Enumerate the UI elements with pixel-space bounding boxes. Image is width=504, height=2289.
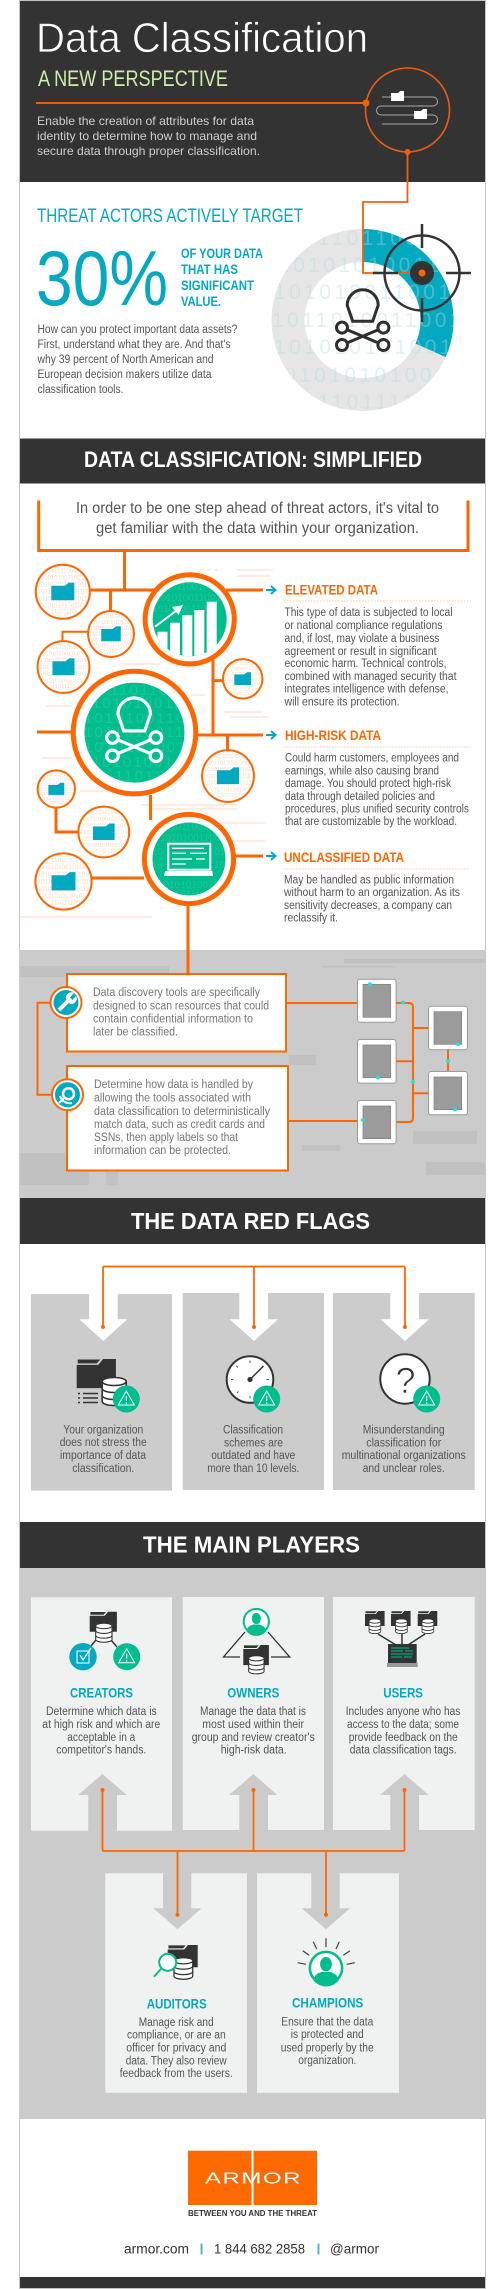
faint background lines bbox=[20, 570, 273, 917]
contact line: 1 844 682 2858 bbox=[214, 2240, 305, 2256]
section header: red flags bbox=[20, 1198, 485, 1244]
section header: simplified: DATA CLASSIFICATION: SIMPLIFIED bbox=[84, 447, 422, 472]
panel: creators: Determine which data is bbox=[46, 1706, 157, 1718]
text block: unclassified data: sensitivity decreases, a company can bbox=[284, 900, 452, 912]
panel: red flag one: importance of data bbox=[60, 1450, 147, 1462]
text block: unclassified data: UNCLASSIFIED DATA bbox=[284, 849, 404, 865]
intro text bbox=[76, 500, 439, 537]
binary pattern: 101010100110010 bbox=[278, 254, 503, 277]
heading: threat actors: THREAT ACTORS ACTIVELY TARGET bbox=[37, 206, 303, 227]
icon: laptop circle: 01 bbox=[214, 847, 226, 858]
text block: elevated data: combined with managed security that bbox=[284, 671, 457, 683]
text block: high-risk data: damage. You should protect high-risk bbox=[285, 778, 451, 790]
diagram connectors bbox=[37, 550, 263, 974]
icon: skull circle: 10101001100010 bbox=[92, 695, 236, 712]
icon: gauge bbox=[227, 1356, 280, 1412]
panel: creators: at high risk and which are bbox=[42, 1719, 160, 1731]
panel: red flag one: does not stress the bbox=[60, 1437, 147, 1449]
text block: elevated data: or national compliance regulations bbox=[284, 620, 443, 632]
panel: red flag two bbox=[183, 1293, 324, 1490]
arrow: high risk bbox=[266, 731, 276, 739]
binary pattern bbox=[274, 230, 454, 409]
text block: elevated data: ELEVATED DATA bbox=[285, 582, 378, 598]
panel: main players background bbox=[19, 1568, 486, 2119]
icon: question mark bbox=[380, 1354, 440, 1412]
panel: auditors: Manage risk and bbox=[139, 2017, 214, 2029]
connector: header to target bbox=[363, 152, 410, 273]
panel: red flag three: multinational organizations bbox=[342, 1450, 466, 1462]
icon: users bbox=[365, 1611, 437, 1667]
icon: laptop circle: 1010101001001 bbox=[158, 880, 231, 891]
threat paragraph: why 39 percent of North American and bbox=[37, 354, 213, 366]
icon: question mark: ? bbox=[396, 1360, 416, 1401]
box: handling: data classification to deterministically bbox=[94, 1106, 270, 1118]
panel: red flag two: Classification bbox=[223, 1424, 283, 1436]
text block: elevated data: and, if lost, may violate a business bbox=[284, 633, 440, 645]
section header: main players bbox=[20, 1522, 485, 1568]
text block: unclassified data bbox=[283, 849, 470, 924]
text block: unclassified data: reclassify it. bbox=[284, 912, 338, 924]
arrow: unclassified bbox=[266, 852, 276, 860]
panel: owners: high-risk data. bbox=[221, 1745, 287, 1757]
threat paragraph: European decision makers utilize data bbox=[38, 369, 212, 381]
panel: auditors bbox=[105, 1873, 247, 2093]
icon: skull circle bbox=[70, 668, 198, 796]
icon: chart circle bbox=[145, 575, 234, 665]
title: Data Classification bbox=[36, 14, 368, 61]
text block: elevated data: will ensure its protection. bbox=[284, 696, 400, 708]
panel: owners: group and review creator's bbox=[192, 1732, 315, 1744]
panel: champions: used properly by the bbox=[281, 2042, 374, 2054]
text block: high-risk data bbox=[284, 727, 471, 828]
threat paragraph: First, understand what they are. And that's bbox=[38, 339, 231, 351]
text block: high-risk data: Could harm customers, employees and bbox=[285, 752, 459, 764]
connector: tool icons bbox=[38, 1003, 52, 1095]
panel: creators: competitor's hands. bbox=[56, 1745, 146, 1757]
box: handling: match data, such as credit cards and bbox=[94, 1119, 265, 1131]
icon: owners bbox=[224, 1609, 290, 1674]
panel: owners: most used within their bbox=[202, 1719, 304, 1731]
connector dot bbox=[404, 149, 410, 155]
icon: laptop circle: 10 bbox=[214, 860, 226, 871]
connector: device network bbox=[287, 1003, 448, 1122]
panel: red flag two: outdated and have bbox=[211, 1450, 295, 1462]
header rule bbox=[36, 100, 370, 106]
box: discovery tools: Data discovery tools are specifically bbox=[93, 987, 260, 999]
icon: chart circle: 10101001100 bbox=[152, 604, 213, 615]
box: discovery tools: later be classified. bbox=[93, 1026, 178, 1038]
panel: auditors: data. They also review bbox=[126, 2055, 227, 2067]
icon: chart circle: 11011001 bbox=[160, 582, 203, 593]
panel: owners: Manage the data that is bbox=[200, 1706, 306, 1718]
panel: users: provide feedback on the bbox=[349, 1732, 458, 1744]
text block: high-risk data: that are customizable by the workload. bbox=[285, 816, 457, 828]
folder circles bbox=[35, 565, 268, 910]
stat label: THAT HAS bbox=[181, 261, 238, 277]
stat label bbox=[181, 245, 263, 309]
panel: champions: is protected and bbox=[291, 2029, 364, 2041]
icon: skull circle: 101101001100111 bbox=[84, 724, 235, 741]
binary pattern: 11011001 bbox=[318, 227, 436, 250]
intro text: get familiar with the data within your organization. bbox=[96, 520, 419, 537]
logo: armor: ARMOR bbox=[205, 2170, 302, 2187]
panel: champions: CHAMPIONS bbox=[292, 1995, 363, 2011]
header description: Enable the creation of attributes for data bbox=[37, 114, 254, 128]
bracket bbox=[39, 500, 468, 550]
connector: main players bbox=[100, 1788, 406, 1917]
icon: chart circle: 101010011001 bbox=[155, 593, 221, 604]
panel: auditors: officer for privacy and bbox=[126, 2042, 226, 2054]
icon: skull circle: 11011001 bbox=[110, 682, 191, 699]
text block: high-risk data: procedures, plus unified security controls bbox=[285, 804, 469, 816]
panel: users: Includes anyone who has bbox=[346, 1706, 461, 1718]
panel: red flag three: classification for bbox=[366, 1438, 441, 1450]
panel: owners bbox=[183, 1597, 324, 1830]
icon: crosshair target bbox=[373, 224, 471, 322]
box: handling: Determine how data is handled by bbox=[94, 1079, 253, 1091]
panel: champions: organization. bbox=[298, 2055, 356, 2067]
icon: skull circle: 101010100101101 bbox=[84, 739, 238, 756]
icon: creators bbox=[69, 1612, 140, 1670]
text block: elevated data bbox=[284, 582, 471, 708]
icon: folders on a track bbox=[366, 68, 450, 152]
threat paragraph bbox=[37, 324, 237, 396]
panel: creators bbox=[31, 1597, 172, 1831]
icon: champions bbox=[298, 1938, 355, 1986]
header description: secure data through proper classification. bbox=[37, 144, 260, 158]
arrow: elevated bbox=[266, 586, 276, 594]
contact line: @armor bbox=[330, 2240, 379, 2256]
donut 30 percent arc bbox=[362, 245, 437, 350]
threat paragraph: classification tools. bbox=[38, 384, 124, 396]
logo: armor bbox=[188, 2151, 317, 2218]
text block: elevated data: economic harm. Technical controls, bbox=[284, 658, 446, 670]
big number: 30% bbox=[36, 234, 168, 322]
box: discovery tools bbox=[67, 974, 286, 1052]
panel: users bbox=[333, 1597, 475, 1830]
section header: red flags: THE DATA RED FLAGS bbox=[131, 1208, 370, 1234]
panel: auditors: AUDITORS bbox=[147, 1995, 207, 2011]
panel: creators: CREATORS bbox=[70, 1685, 133, 1701]
panel: red flag three: and unclear roles. bbox=[363, 1463, 445, 1475]
panel: red flag one: classification. bbox=[72, 1463, 134, 1475]
contact line bbox=[124, 2240, 379, 2256]
icon: laptop circle: 11011001 bbox=[165, 822, 208, 833]
icon: skull circle: 11011110 bbox=[115, 768, 193, 785]
text block: high-risk data: data through detailed policies and bbox=[285, 791, 435, 803]
panel: red flag two: schemes are bbox=[224, 1438, 283, 1450]
icon: folder with database bbox=[77, 1359, 140, 1412]
panel: champions: Ensure that the data bbox=[281, 2016, 374, 2028]
panel: auditors: feedback from the users. bbox=[120, 2068, 233, 2080]
stat label: VALUE. bbox=[181, 293, 221, 309]
icon: skull circle: 101010010011 bbox=[92, 754, 215, 771]
icon: auditors bbox=[154, 1945, 198, 1979]
panel: users: data classification tags. bbox=[350, 1745, 457, 1757]
subtitle: A NEW PERSPECTIVE bbox=[38, 66, 228, 91]
box: discovery tools: designed to scan resources that could bbox=[93, 1000, 269, 1012]
panel: header bbox=[20, 1, 485, 182]
box: handling: information can be protected. bbox=[94, 1145, 231, 1157]
panel: red flag one bbox=[31, 1294, 172, 1491]
panel: discovery tools band bbox=[19, 950, 486, 1198]
contact line: armor.com bbox=[124, 2240, 189, 2256]
text block: high-risk data: earnings, while also causing brand bbox=[285, 766, 439, 778]
icon: laptop circle: 10 bbox=[152, 860, 164, 871]
connector: red flags bbox=[101, 1266, 407, 1329]
connector from laptop to box bbox=[186, 950, 190, 974]
stat label: SIGNIFICANT bbox=[181, 277, 254, 293]
logo: armor: BETWEEN YOU AND THE THREAT bbox=[188, 2209, 317, 2218]
icon: laptop circle bbox=[144, 814, 234, 904]
panel: champions bbox=[257, 1873, 399, 2093]
panel: red flag two: more than 10 levels. bbox=[207, 1463, 299, 1475]
binary pattern: 11011110 bbox=[318, 391, 432, 414]
section header: simplified bbox=[20, 438, 485, 484]
devices bbox=[358, 979, 468, 1144]
panel: owners: OWNERS bbox=[227, 1685, 279, 1701]
box: handling: allowing the tools associated with bbox=[94, 1092, 251, 1104]
panel: creators: acceptable in a bbox=[67, 1732, 136, 1744]
text block: unclassified data: May be handled as public information bbox=[284, 874, 454, 886]
icon: laptop circle: 110111 bbox=[170, 890, 202, 901]
section header: main players: THE MAIN PLAYERS bbox=[143, 1532, 360, 1558]
panel: red flag one: Your organization bbox=[63, 1424, 143, 1436]
panel: red flag three bbox=[333, 1293, 475, 1490]
panel: donut background bbox=[272, 229, 454, 411]
icon: wrench bbox=[50, 987, 82, 1018]
header description bbox=[37, 114, 260, 158]
text block: high-risk data: HIGH-RISK DATA bbox=[285, 727, 381, 743]
icon: laptop circle: 10 bbox=[152, 847, 164, 858]
icon: skull and crossbones bbox=[336, 290, 389, 350]
connector: small circles bbox=[62, 632, 88, 642]
panel: auditors: compliance, or are an bbox=[127, 2030, 226, 2042]
text block: elevated data: integrates intelligence with defense, bbox=[284, 684, 448, 696]
panel: users: USERS bbox=[383, 1685, 423, 1701]
text block: elevated data: agreement or result in significant bbox=[284, 646, 437, 658]
icon: magnifier bbox=[52, 1079, 83, 1110]
panel: red flag three: Misunderstanding bbox=[363, 1424, 445, 1436]
icon: laptop circle: 101010011001 bbox=[160, 833, 226, 844]
box: handling: SSNs, then apply labels so that bbox=[94, 1132, 239, 1144]
threat paragraph: How can you protect important data assets? bbox=[38, 324, 238, 336]
box: handling bbox=[67, 1066, 288, 1170]
text block: elevated data: This type of data is subjected to local bbox=[284, 607, 452, 619]
icon: skull circle: 101010011001101 bbox=[84, 710, 237, 727]
footer bar bbox=[20, 2277, 485, 2288]
box: discovery tools: contain confidential information to bbox=[93, 1014, 253, 1026]
header description: identity to determine how to manage and bbox=[37, 129, 257, 143]
stat label: OF YOUR DATA bbox=[181, 245, 263, 261]
panel: users: access to the data; some bbox=[347, 1719, 459, 1731]
text block: unclassified data: without harm to an organization. As its bbox=[283, 887, 460, 899]
intro text: In order to be one step ahead of threat actors, it's vital to bbox=[76, 500, 439, 517]
